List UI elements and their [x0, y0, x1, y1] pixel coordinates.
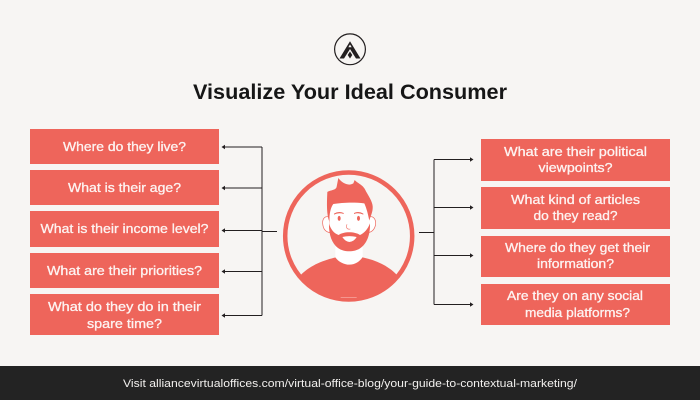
left connector arrows: [222, 145, 277, 318]
face: [329, 203, 369, 250]
box: articles: [481, 187, 670, 229]
panel: left questions: [30, 129, 219, 335]
box: spare time: [30, 294, 219, 335]
box: information: Where do they get their: [505, 240, 651, 255]
footer bar: [0, 366, 700, 400]
title: Visualize Your Ideal Consumer: [193, 80, 508, 104]
box: information: information?: [537, 256, 614, 271]
box: priorities: What are their priorities?: [47, 263, 202, 278]
footer bar: Visit alliancevirtualoffices.com/virtual-office-blog/your-guide-to-contextual-marketing/: [123, 378, 578, 390]
box: income: What is their income level?: [40, 221, 208, 236]
box: age: [30, 170, 219, 205]
ears: [323, 217, 376, 233]
shirt and neck: [301, 245, 397, 301]
icon: logo: [335, 34, 365, 65]
hair: [327, 178, 373, 222]
box: political viewpoints: What are their political: [504, 144, 647, 159]
box: spare time: What do they do in their: [48, 299, 202, 314]
illustration: consumer avatar: [285, 172, 412, 301]
box: information: [481, 236, 670, 277]
box: spare time: spare time?: [87, 316, 162, 331]
eyes and eyebrows: [334, 212, 363, 221]
box: social media: media platforms?: [525, 305, 630, 320]
box: age: What is their age?: [68, 180, 181, 195]
box: priorities: [30, 253, 219, 288]
panel: right questions: [481, 139, 670, 325]
box: political viewpoints: [481, 139, 670, 181]
box: where they live: [30, 129, 219, 164]
box: social media: [481, 284, 670, 325]
box: social media: Are they on any social: [507, 288, 643, 303]
box: articles: What kind of articles: [511, 192, 641, 207]
box: articles: do they read?: [534, 208, 618, 223]
box: political viewpoints: viewpoints?: [538, 160, 612, 175]
beard: [329, 223, 370, 251]
right connector arrows: [419, 157, 474, 307]
box: income: [30, 211, 219, 247]
head: [323, 178, 376, 251]
box: where they live: Where do they live?: [63, 139, 186, 154]
nose: [347, 224, 350, 229]
